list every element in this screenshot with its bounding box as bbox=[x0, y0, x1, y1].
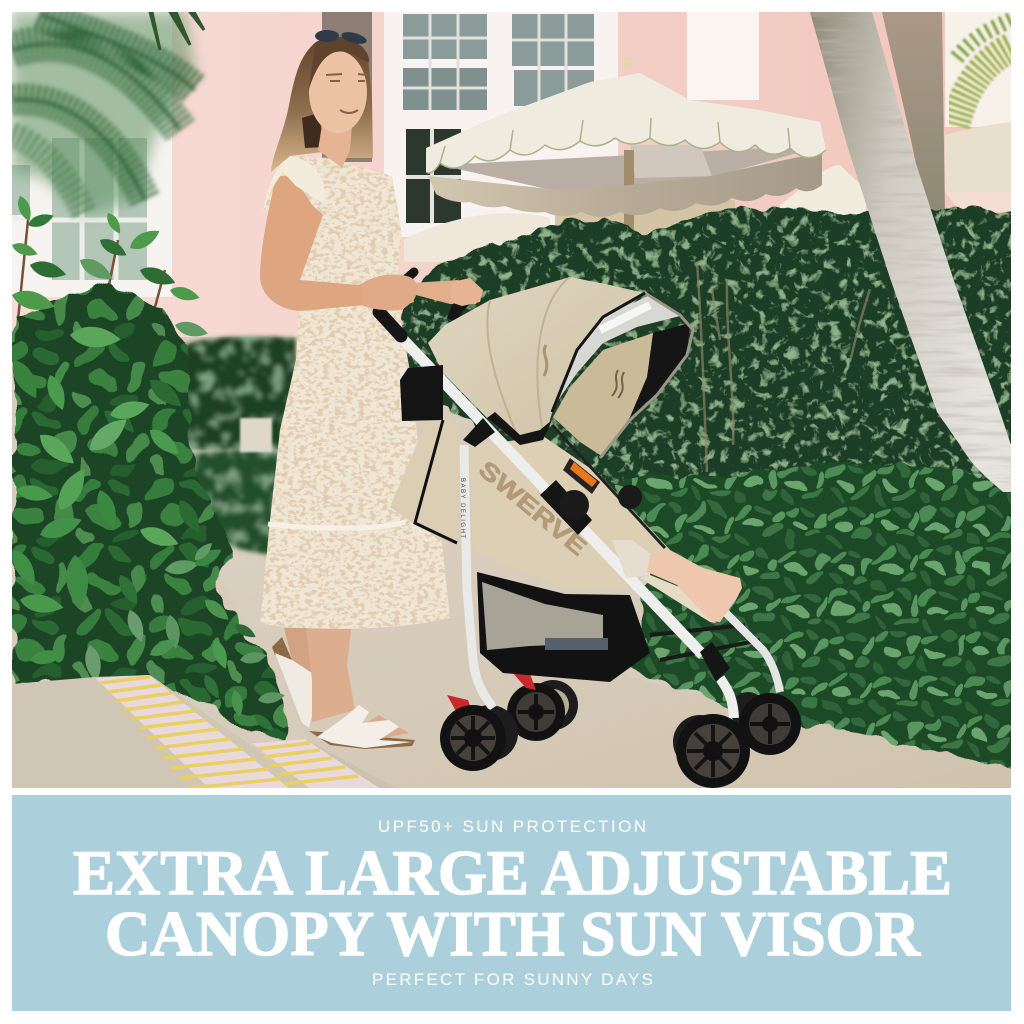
white column bbox=[687, 12, 759, 100]
front sandal bbox=[309, 705, 415, 749]
footrest bbox=[640, 575, 716, 623]
canopy interior bbox=[553, 333, 653, 457]
umbrella finial bbox=[623, 57, 633, 67]
lower right frame curve bbox=[720, 678, 734, 718]
far right umbrella bbox=[945, 122, 1011, 212]
second stone step bbox=[252, 740, 326, 752]
bush stems bbox=[16, 220, 166, 324]
headline bbox=[73, 838, 952, 969]
interior logo bbox=[612, 370, 624, 398]
bush leafy mass bbox=[12, 285, 285, 742]
back hedge bbox=[400, 209, 1018, 500]
umbrella scallop trim bbox=[426, 118, 826, 173]
hair fringe bbox=[308, 37, 369, 92]
umbrella pole bbox=[624, 150, 634, 230]
far arm bbox=[412, 280, 482, 304]
canopy black inner bbox=[630, 323, 690, 417]
small background umbrellas bbox=[404, 165, 866, 262]
rear knob bbox=[618, 485, 642, 509]
rear wheels bbox=[462, 680, 801, 761]
near left wheel bbox=[440, 705, 506, 771]
visor reflection bbox=[600, 305, 650, 330]
lower footrest bars bbox=[650, 625, 760, 660]
face bbox=[309, 51, 367, 133]
canopy logo bbox=[544, 345, 547, 376]
black handle bbox=[379, 312, 401, 336]
left bush bbox=[6, 194, 286, 742]
front wheel bbox=[673, 714, 750, 788]
sunglasses bbox=[315, 30, 368, 46]
eyebrow text: UPF50+ SUN PROTECTION bbox=[378, 817, 646, 836]
left frame tube bbox=[464, 445, 493, 708]
baby delight side text: BABY DELIGHT bbox=[459, 478, 465, 540]
swerve text: SWERVE bbox=[473, 456, 592, 561]
center window bbox=[384, 12, 618, 237]
back sandal bbox=[272, 637, 314, 728]
back leg bbox=[284, 628, 312, 673]
facial features bbox=[326, 74, 367, 113]
hair shadow bbox=[302, 113, 325, 148]
stroller bbox=[379, 272, 801, 788]
hair bbox=[271, 36, 373, 172]
woman bbox=[260, 30, 482, 749]
umbrella underside bbox=[440, 148, 796, 190]
far right pale building bbox=[945, 12, 1011, 127]
grip top bbox=[405, 272, 414, 280]
frame joints bbox=[463, 418, 730, 682]
silver sun visor bbox=[557, 295, 680, 402]
front hedge bbox=[615, 462, 1020, 770]
rear handle bbox=[447, 282, 482, 322]
basket mesh contents bbox=[482, 582, 603, 650]
basket bbox=[477, 572, 650, 682]
frame recline knob bbox=[559, 490, 589, 520]
palm top right bbox=[955, 20, 1011, 125]
large patio umbrella bbox=[426, 57, 826, 245]
cup holder bbox=[400, 365, 443, 421]
ground pavement bbox=[512, 724, 1011, 788]
baby legs and feet bbox=[647, 550, 742, 622]
rear frame tube bbox=[552, 425, 665, 548]
umbrella lower valance bbox=[428, 152, 822, 217]
stone step bbox=[12, 675, 312, 788]
dress bbox=[260, 156, 450, 629]
orange warning label bbox=[563, 458, 600, 494]
umbrella roof bbox=[426, 73, 826, 173]
canopy folds bbox=[487, 277, 570, 442]
baby striped shorts bbox=[612, 540, 652, 578]
canopy bbox=[428, 277, 645, 445]
hands on handle bbox=[363, 275, 483, 310]
headline: CANOPY WITH SUN VISOR bbox=[105, 899, 921, 969]
bush leaves bbox=[6, 194, 286, 734]
dress sleeve bbox=[263, 156, 325, 212]
headline: EXTRA LARGE ADJUSTABLE bbox=[73, 838, 952, 908]
hedge stems bbox=[697, 262, 870, 472]
pink building wall bbox=[12, 12, 1011, 337]
sharp palm leaves top bbox=[150, 12, 204, 50]
near arm bbox=[260, 176, 414, 311]
palm fronds top left bbox=[12, 14, 195, 215]
palm soft mass bbox=[12, 12, 195, 215]
dark hedge left behind woman bbox=[180, 336, 300, 555]
neck bbox=[318, 125, 352, 168]
visor outer edge bbox=[552, 293, 693, 458]
brown tree trunk behind woman bbox=[322, 12, 372, 162]
visor black binding bbox=[552, 293, 645, 412]
striped ramp right bbox=[252, 739, 379, 788]
left window bbox=[12, 12, 172, 297]
photo scene bbox=[6, 12, 1020, 788]
rear right frame tube bbox=[725, 612, 780, 692]
ground base bbox=[12, 337, 704, 771]
hood rear fold bbox=[390, 408, 460, 543]
main frame tube bbox=[397, 333, 703, 655]
canopy bottom clip bbox=[487, 412, 552, 445]
rear fold binding bbox=[415, 420, 457, 543]
front leg bbox=[305, 622, 355, 722]
caption panel bbox=[12, 795, 1011, 1011]
water bottle bbox=[545, 638, 608, 650]
back tree trunk right bbox=[882, 12, 945, 215]
striped ramp left bbox=[95, 675, 289, 788]
subtext: PERFECT FOR SUNNY DAYS bbox=[372, 970, 653, 989]
umbrella lower tan drop bbox=[555, 200, 735, 236]
large pale palm trunk bbox=[810, 12, 1011, 492]
dress lace band bbox=[268, 522, 405, 528]
underside light panel bbox=[630, 145, 712, 178]
seat fabric bbox=[470, 436, 672, 590]
red brake pedals bbox=[447, 672, 536, 725]
